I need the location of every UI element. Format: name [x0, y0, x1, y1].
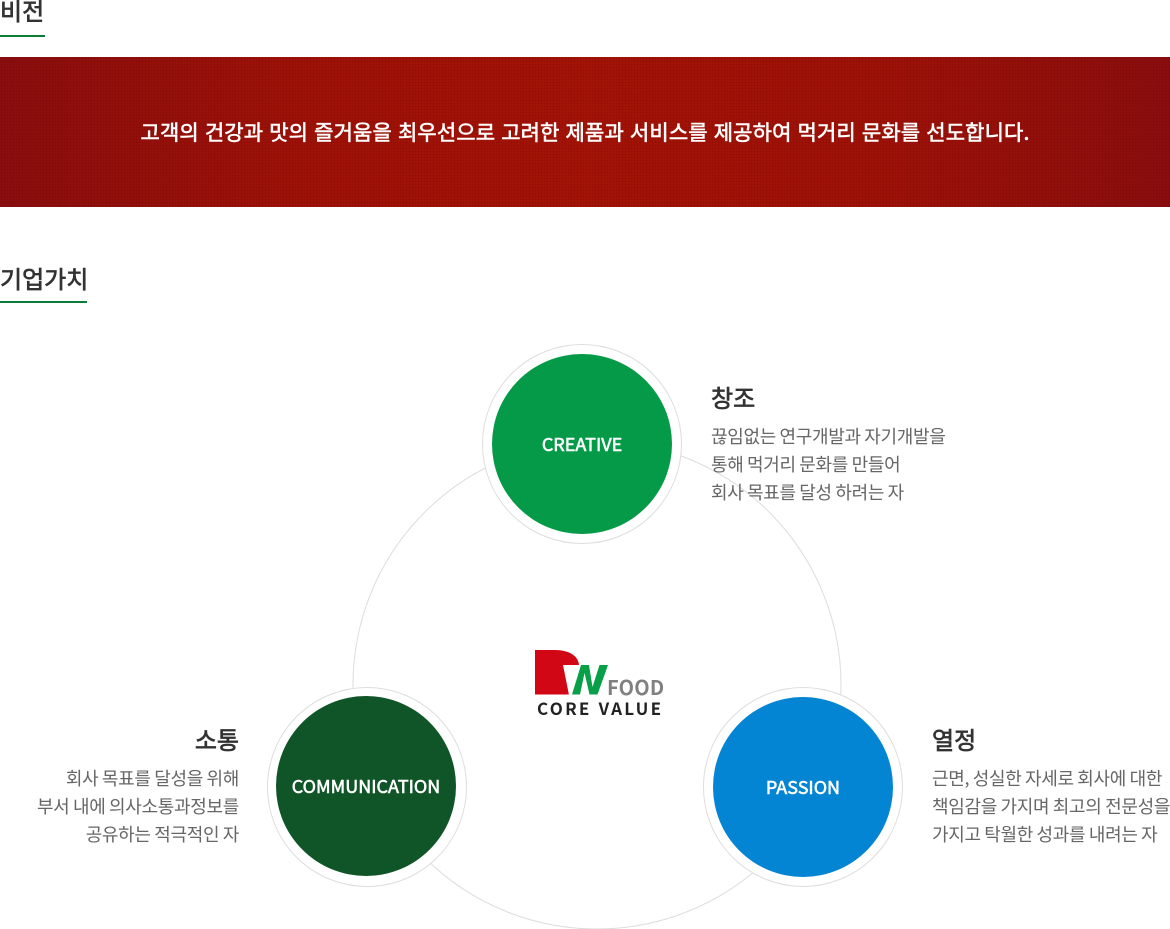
communication label [276, 696, 456, 876]
logo: DW Food core value [535, 650, 664, 720]
text: passion: 가지고 탁월한 성과를 내려는 자 [932, 821, 1157, 847]
logo mark [535, 650, 608, 694]
logo word core value: CORE VALUE [537, 695, 663, 720]
passion label [713, 697, 893, 877]
circle: creative [482, 344, 682, 544]
logo word food: FOOD [607, 672, 664, 701]
text: creative: 통해 먹거리 문화를 만들어 [711, 451, 900, 477]
text: communication: 소통 [195, 721, 239, 756]
text: passion: 근면, 성실한 자세로 회사에 대한 [932, 765, 1162, 791]
circle: passion [703, 687, 903, 887]
communication label: COMMUNICATION [292, 773, 440, 799]
circle: communication [267, 687, 467, 887]
text: creative: 끊임없는 연구개발과 자기개발을 [711, 423, 946, 449]
heading: core values: 기업가치 [0, 260, 88, 295]
text: creative: 창조 [711, 379, 755, 414]
text: passion: 책임감을 가지며 최고의 전문성을 [932, 793, 1170, 819]
text: passion [932, 721, 1170, 847]
creative label [492, 354, 672, 534]
text: communication [37, 721, 239, 847]
text: communication: 부서 내에 의사소통과정보를 [37, 793, 239, 819]
vision banner [0, 57, 1170, 207]
text: communication: 회사 목표를 달성을 위해 [66, 765, 239, 791]
creative label: CREATIVE [542, 431, 622, 457]
passion label: PASSION [766, 774, 840, 800]
banner text: 고객의 건강과 맛의 즐거움을 최우선으로 고려한 제품과 서비스를 제공하여 먹거리 문화를 선도합니다. [140, 117, 1030, 147]
text: passion: 열정 [932, 721, 976, 756]
text: creative [711, 379, 946, 505]
text: communication: 공유하는 적극적인 자 [86, 821, 239, 847]
text: creative: 회사 목표를 달성 하려는 자 [711, 479, 904, 505]
large connecting circle [352, 456, 842, 929]
